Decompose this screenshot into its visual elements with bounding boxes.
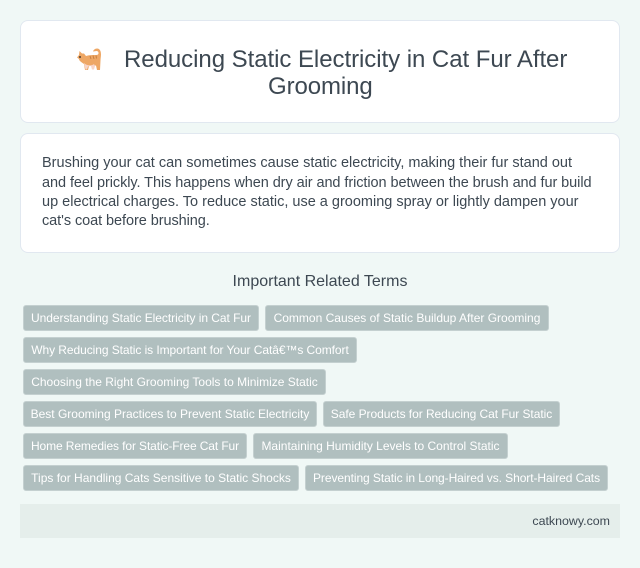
- footer: [20, 504, 620, 538]
- text block: [42, 155, 591, 229]
- chip: Home Remedies for Static-Free Cat Fur: [31, 439, 239, 453]
- chip: [23, 401, 317, 427]
- chip: Safe Products for Reducing Cat Fur Static: [331, 407, 552, 421]
- icon: cat: [77, 48, 101, 70]
- chip: [23, 433, 247, 459]
- chip: [23, 465, 299, 491]
- heading: Grooming: [268, 73, 373, 100]
- chip: [253, 433, 508, 459]
- chip: [23, 337, 357, 363]
- chip: Common Causes of Static Buildup After Grooming: [274, 311, 540, 325]
- text block: and feel prickly. This happens when dry air and friction between the brush and fur build: [42, 175, 591, 191]
- chip: Choosing the Right Grooming Tools to Minimize Static: [31, 375, 318, 389]
- chip: Tips for Handling Cats Sensitive to Static Shocks: [31, 471, 291, 485]
- chip: Why Reducing Static is Important for Your Catâ€™s Comfort: [31, 343, 349, 357]
- chip: Maintaining Humidity Levels to Control Static: [261, 439, 500, 453]
- panel: related term chips: [23, 305, 608, 491]
- chip: [265, 305, 549, 331]
- panel: intro paragraph: [20, 133, 620, 253]
- chip: Understanding Static Electricity in Cat Fur: [31, 311, 251, 325]
- text block: Brushing your cat can sometimes cause static electricity, making their fur stand out: [42, 155, 572, 171]
- chip: [305, 465, 608, 491]
- heading: [124, 46, 567, 100]
- heading: related terms: Important Related Terms: [233, 273, 407, 290]
- chip: [23, 305, 259, 331]
- panel: title card: [20, 20, 620, 123]
- chip: Best Grooming Practices to Prevent Static Electricity: [31, 407, 309, 421]
- heading: Reducing Static Electricity in Cat Fur After: [124, 46, 567, 73]
- footer credit: catknowy.com: [532, 514, 610, 528]
- text block: up electrical charges. To reduce static, use a grooming spray or lightly dampen your: [42, 194, 579, 210]
- chip: [323, 401, 560, 427]
- text block: cat's coat before brushing.: [42, 213, 210, 229]
- chip: [23, 369, 326, 395]
- chip: Preventing Static in Long-Haired vs. Short-Haired Cats: [313, 471, 600, 485]
